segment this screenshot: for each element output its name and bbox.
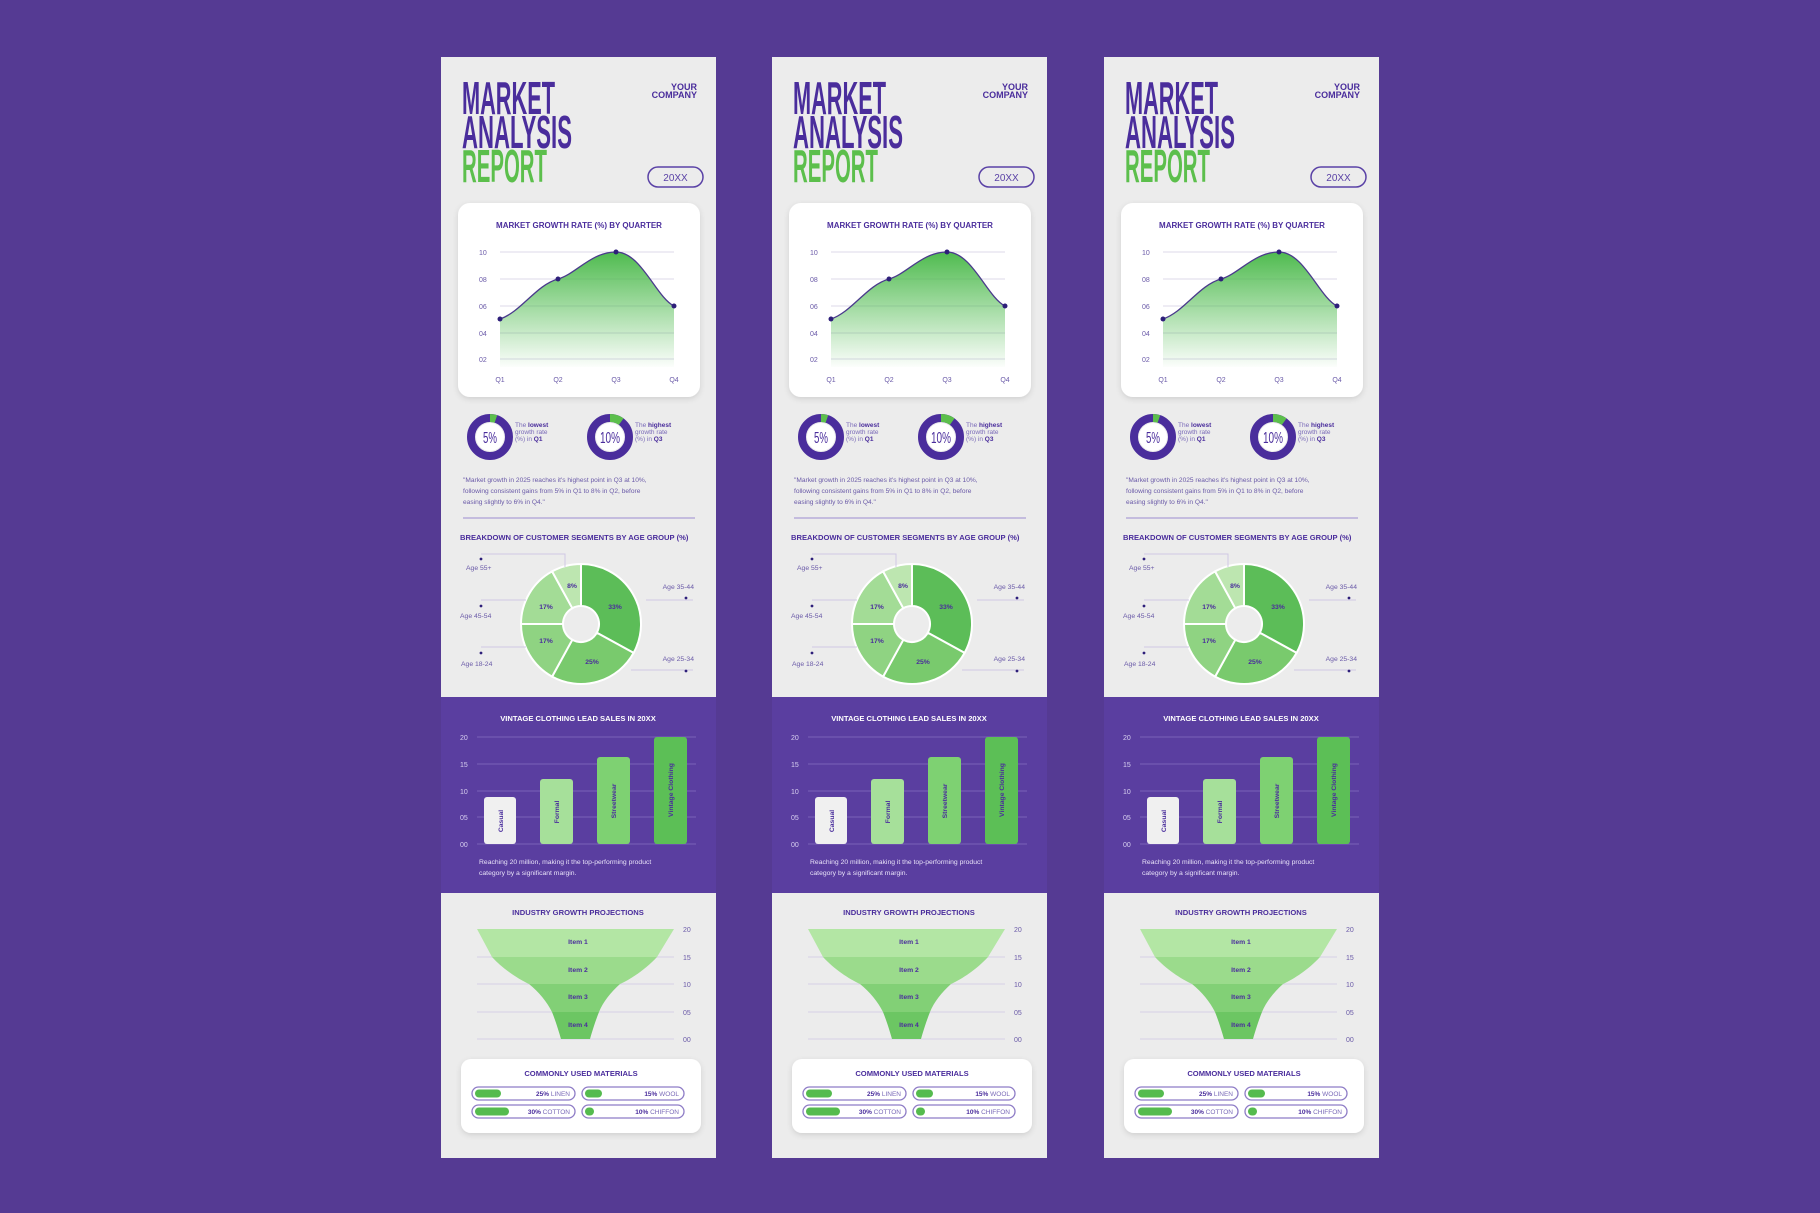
panel: growth rate chart: 06 (479, 304, 487, 311)
donut: lowest: (%) in Q1 (1178, 436, 1206, 443)
panel: growth rate chart: MARKET GROWTH RATE (%) BY QUARTER (827, 221, 993, 230)
quote text: following consistent gains from 5% in Q1 to 8% in Q2, before (1126, 488, 1304, 495)
panel: materials: COMMONLY USED MATERIALS (524, 1069, 638, 1078)
panel: funnel projections: 05 (683, 1010, 691, 1017)
panel: sales bar chart: Streetwear (942, 783, 949, 818)
panel: sales bar chart: VINTAGE CLOTHING LEAD SALES IN 20XX (500, 714, 656, 723)
panel: materials (792, 1059, 1032, 1133)
title: REPORT (793, 140, 878, 192)
panel: funnel projections: INDUSTRY GROWTH PROJECTIONS (512, 908, 644, 917)
panel: growth rate chart (789, 203, 1031, 397)
panel: sales bar chart: category by a significant margin. (1142, 870, 1240, 877)
panel: funnel projections: 10 (683, 982, 691, 989)
panel: sales bar chart: Vintage Clothing (1331, 763, 1338, 817)
quote text: "Market growth in 2025 reaches it's highest point in Q3 at 10%, (794, 477, 978, 484)
quote text (794, 477, 978, 506)
year pill (979, 167, 1034, 187)
panel: sales bar chart: 10 (460, 789, 468, 796)
panel: growth rate chart: Q4 (1332, 377, 1342, 384)
panel: infographic copy 2 (772, 57, 1047, 1158)
title: MARKET (1125, 72, 1218, 124)
donut: lowest: growth rate (1178, 429, 1211, 436)
panel: sales bar chart: Casual (829, 810, 836, 832)
panel: funnel projections (808, 908, 1022, 1044)
panel: age group pie: Age 18-24 (1124, 661, 1156, 668)
panel: funnel projections: 05 (1346, 1010, 1354, 1017)
title: REPORT (1125, 140, 1210, 192)
panel: sales bar chart: 05 (460, 815, 468, 822)
title (1125, 72, 1235, 192)
quote text: following consistent gains from 5% in Q1 to 8% in Q2, before (463, 488, 641, 495)
panel: funnel projections: Item 1 (568, 939, 588, 946)
panel: sales bar chart: 15 (791, 762, 799, 769)
panel: age group pie: Age 25-34 (1326, 656, 1357, 663)
panel: age group pie: BREAKDOWN OF CUSTOMER SEGMENTS BY AGE GROUP (%) (460, 533, 689, 542)
panel: growth rate chart: Q1 (1158, 377, 1168, 384)
quote text (463, 477, 647, 506)
panel: growth rate chart: Q4 (669, 377, 679, 384)
panel: materials: COMMONLY USED MATERIALS (855, 1069, 969, 1078)
panel: growth rate chart: 02 (1142, 357, 1150, 364)
panel: age group pie: 8% (898, 583, 908, 590)
company name (983, 82, 1028, 100)
panel: sales bar chart: Reaching 20 million, making it the top-performing product (810, 859, 982, 866)
company name: YOUR (671, 82, 697, 92)
quote text: following consistent gains from 5% in Q1 to 8% in Q2, before (794, 488, 972, 495)
quote text: "Market growth in 2025 reaches it's highest point in Q3 at 10%, (1126, 477, 1310, 484)
panel: growth rate chart: 04 (479, 331, 487, 338)
panel: age group pie: 17% (1202, 604, 1216, 611)
panel: growth rate chart: 08 (810, 277, 818, 284)
panel: funnel projections: INDUSTRY GROWTH PROJECTIONS (1175, 908, 1307, 917)
panel: materials: 25% LINEN (867, 1091, 901, 1098)
panel: growth rate chart (1121, 203, 1363, 397)
panel: sales bar chart: Formal (1217, 801, 1224, 823)
panel: sales bar chart: Streetwear (611, 783, 618, 818)
panel: sales bar chart: 00 (460, 842, 468, 849)
panel: funnel projections: INDUSTRY GROWTH PROJECTIONS (843, 908, 975, 917)
donut: highest: The highest (635, 422, 672, 429)
title (793, 72, 903, 192)
panel: growth rate chart: Q3 (611, 377, 621, 384)
panel: sales bar chart: Casual (1161, 810, 1168, 832)
panel: sales bar chart: 15 (1123, 762, 1131, 769)
panel: funnel projections: Item 1 (899, 939, 919, 946)
panel: sales bar chart: 00 (791, 842, 799, 849)
panel: sales bar chart: 05 (791, 815, 799, 822)
panel: funnel projections: 00 (683, 1037, 691, 1044)
panel: funnel projections: 10 (1346, 982, 1354, 989)
panel: sales bar chart: 10 (791, 789, 799, 796)
donut: highest: (%) in Q3 (966, 436, 994, 443)
panel: growth rate chart: 08 (1142, 277, 1150, 284)
panel: growth rate chart: 06 (1142, 304, 1150, 311)
donut: highest: growth rate (966, 429, 999, 436)
company name: COMPANY (983, 90, 1028, 100)
panel: growth rate chart: 02 (479, 357, 487, 364)
panel: age group pie: 33% (608, 604, 622, 611)
panel: sales bar chart: 00 (1123, 842, 1131, 849)
panel: age group pie: Age 45-54 (1123, 613, 1155, 620)
donut: lowest: (%) in Q1 (515, 436, 543, 443)
panel: funnel projections: 20 (1014, 927, 1022, 934)
panel: materials: 10% CHIFFON (1298, 1109, 1342, 1116)
panel: growth rate chart: Q2 (884, 377, 894, 384)
quote text: easing slightly to 6% in Q4." (1126, 499, 1209, 506)
company name: YOUR (1002, 82, 1028, 92)
panel: sales bar chart: 20 (1123, 735, 1131, 742)
panel: age group pie: 8% (567, 583, 577, 590)
panel: age group pie: 17% (539, 638, 553, 645)
panel: growth rate chart: 10 (810, 250, 818, 257)
donut: highest: The highest (1298, 422, 1335, 429)
panel: sales bar chart: 15 (460, 762, 468, 769)
panel: sales bar chart: Vintage Clothing (668, 763, 675, 817)
panel: materials: 25% LINEN (1199, 1091, 1233, 1098)
panel: age group pie: 25% (1248, 659, 1262, 666)
panel: materials: COMMONLY USED MATERIALS (1187, 1069, 1301, 1078)
panel: infographic copy 3: ANALYSIS (1125, 106, 1235, 158)
donut: lowest (471, 418, 549, 456)
panel: infographic copy 3 (1104, 57, 1379, 1158)
panel: age group pie (1123, 533, 1357, 684)
panel: funnel projections: 00 (1346, 1037, 1354, 1044)
panel: age group pie: Age 35-44 (663, 584, 694, 591)
panel: funnel projections: 05 (1014, 1010, 1022, 1017)
panel: sales bar chart: Casual (498, 810, 505, 832)
panel: age group pie: 25% (916, 659, 930, 666)
panel: growth rate chart: Q1 (826, 377, 836, 384)
panel: sales bar chart: Formal (554, 801, 561, 823)
panel: sales bar chart: 10 (1123, 789, 1131, 796)
panel: age group pie: 33% (1271, 604, 1285, 611)
donut: lowest: 5% (1146, 430, 1160, 447)
panel: growth rate chart: Q2 (553, 377, 563, 384)
title: MARKET (462, 72, 555, 124)
panel: sales bar chart: Vintage Clothing (999, 763, 1006, 817)
donut: lowest: growth rate (846, 429, 879, 436)
panel: age group pie: 17% (870, 604, 884, 611)
panel: age group pie: Age 18-24 (461, 661, 493, 668)
panel: growth rate chart: Q2 (1216, 377, 1226, 384)
panel: funnel projections: Item 2 (568, 967, 588, 974)
panel: funnel projections: Item 2 (899, 967, 919, 974)
panel: funnel projections (477, 908, 691, 1044)
panel: age group pie: Age 18-24 (792, 661, 824, 668)
panel: growth rate chart: Q4 (1000, 377, 1010, 384)
donut: lowest: The lowest (1178, 422, 1212, 429)
panel: age group pie: Age 35-44 (1326, 584, 1357, 591)
panel: funnel projections: 15 (683, 955, 691, 962)
year pill (1311, 167, 1366, 187)
title: MARKET (793, 72, 886, 124)
donut: lowest: 5% (483, 430, 497, 447)
donut: highest: growth rate (635, 429, 668, 436)
panel: growth rate chart: 06 (810, 304, 818, 311)
title (462, 72, 572, 192)
donut: highest: (%) in Q3 (1298, 436, 1326, 443)
panel: age group pie: 17% (1202, 638, 1216, 645)
panel: sales bar chart (441, 697, 716, 893)
panel: sales bar chart: 05 (1123, 815, 1131, 822)
panel: age group pie: 17% (870, 638, 884, 645)
panel: materials: 30% COTTON (1191, 1109, 1233, 1116)
panel: sales bar chart: Reaching 20 million, making it the top-performing product (479, 859, 651, 866)
panel: growth rate chart: 08 (479, 277, 487, 284)
panel: age group pie: Age 25-34 (994, 656, 1025, 663)
quote text: "Market growth in 2025 reaches it's highest point in Q3 at 10%, (463, 477, 647, 484)
panel: age group pie: Age 45-54 (460, 613, 492, 620)
donut: lowest (1134, 418, 1212, 456)
donut: highest (591, 418, 672, 456)
company name: COMPANY (652, 90, 697, 100)
panel: age group pie: Age 55+ (1129, 565, 1155, 572)
panel: age group pie (460, 533, 694, 684)
company name: YOUR (1334, 82, 1360, 92)
panel: age group pie: Age 35-44 (994, 584, 1025, 591)
panel: materials: 30% COTTON (528, 1109, 570, 1116)
company name (652, 82, 697, 100)
panel: growth rate chart: 04 (810, 331, 818, 338)
panel: funnel projections: 20 (683, 927, 691, 934)
panel: age group pie: BREAKDOWN OF CUSTOMER SEGMENTS BY AGE GROUP (%) (791, 533, 1020, 542)
donut: highest (1254, 418, 1335, 456)
panel: growth rate chart: Q3 (1274, 377, 1284, 384)
donut: highest: growth rate (1298, 429, 1331, 436)
panel: growth rate chart: 10 (1142, 250, 1150, 257)
panel: sales bar chart (1104, 697, 1379, 893)
donut: lowest: 5% (814, 430, 828, 447)
panel: funnel projections: Item 3 (899, 994, 919, 1001)
panel: age group pie: Age 45-54 (791, 613, 823, 620)
panel: materials: 10% CHIFFON (966, 1109, 1010, 1116)
panel: materials: 10% CHIFFON (635, 1109, 679, 1116)
panel: age group pie: 8% (1230, 583, 1240, 590)
panel: materials: 15% WOOL (1307, 1091, 1342, 1098)
quote text: easing slightly to 6% in Q4." (794, 499, 877, 506)
panel: growth rate chart: Q3 (942, 377, 952, 384)
panel: funnel projections: 00 (1014, 1037, 1022, 1044)
panel: age group pie: Age 25-34 (663, 656, 694, 663)
donut: highest: 10% (1263, 430, 1283, 447)
panel: funnel projections: Item 1 (1231, 939, 1251, 946)
quote text (1126, 477, 1310, 506)
panel: growth rate chart: MARKET GROWTH RATE (%) BY QUARTER (496, 221, 662, 230)
panel: sales bar chart: category by a significant margin. (479, 870, 577, 877)
year pill (648, 167, 703, 187)
panel: funnel projections (1140, 908, 1354, 1044)
donut: lowest: growth rate (515, 429, 548, 436)
donut: highest (922, 418, 1003, 456)
panel: growth rate chart: MARKET GROWTH RATE (%) BY QUARTER (1159, 221, 1325, 230)
panel: funnel projections: 15 (1346, 955, 1354, 962)
quote text: easing slightly to 6% in Q4." (463, 499, 546, 506)
panel: funnel projections: Item 4 (568, 1022, 588, 1029)
panel: materials (461, 1059, 701, 1133)
panel: age group pie: Age 55+ (797, 565, 823, 572)
panel: funnel projections: 20 (1346, 927, 1354, 934)
donut: highest: (%) in Q3 (635, 436, 663, 443)
donut: lowest: The lowest (846, 422, 880, 429)
panel: growth rate chart (458, 203, 700, 397)
panel: materials: 15% WOOL (644, 1091, 679, 1098)
panel: sales bar chart: Streetwear (1274, 783, 1281, 818)
year pill: 20XX (994, 173, 1019, 184)
panel: age group pie: 25% (585, 659, 599, 666)
panel: materials: 25% LINEN (536, 1091, 570, 1098)
panel: growth rate chart: 02 (810, 357, 818, 364)
year pill: 20XX (663, 173, 688, 184)
panel: age group pie (791, 533, 1025, 684)
donut: highest: The highest (966, 422, 1003, 429)
panel: sales bar chart: VINTAGE CLOTHING LEAD SALES IN 20XX (831, 714, 987, 723)
panel: age group pie: BREAKDOWN OF CUSTOMER SEGMENTS BY AGE GROUP (%) (1123, 533, 1352, 542)
donut: lowest: (%) in Q1 (846, 436, 874, 443)
panel: age group pie: Age 55+ (466, 565, 492, 572)
donut: highest: 10% (600, 430, 620, 447)
panel: sales bar chart: 20 (460, 735, 468, 742)
panel: growth rate chart: 04 (1142, 331, 1150, 338)
panel: funnel projections: Item 2 (1231, 967, 1251, 974)
donut: lowest: The lowest (515, 422, 549, 429)
donut: lowest (802, 418, 880, 456)
panel: age group pie: 17% (539, 604, 553, 611)
panel: age group pie: 33% (939, 604, 953, 611)
panel: sales bar chart: Reaching 20 million, making it the top-performing product (1142, 859, 1314, 866)
panel: funnel projections: Item 4 (899, 1022, 919, 1029)
panel: funnel projections: 10 (1014, 982, 1022, 989)
company name (1315, 82, 1360, 100)
panel: growth rate chart: Q1 (495, 377, 505, 384)
panel: funnel projections: Item 3 (1231, 994, 1251, 1001)
panel: infographic copy 2: ANALYSIS (793, 106, 903, 158)
panel: sales bar chart: 20 (791, 735, 799, 742)
panel: funnel projections: Item 4 (1231, 1022, 1251, 1029)
donut: highest: 10% (931, 430, 951, 447)
panel: infographic copy 1 (441, 57, 716, 1158)
panel: infographic copy 1: ANALYSIS (462, 106, 572, 158)
panel: materials (1124, 1059, 1364, 1133)
panel: sales bar chart (772, 697, 1047, 893)
panel: materials: 15% WOOL (975, 1091, 1010, 1098)
panel: funnel projections: Item 3 (568, 994, 588, 1001)
panel: funnel projections: 15 (1014, 955, 1022, 962)
panel: sales bar chart: VINTAGE CLOTHING LEAD SALES IN 20XX (1163, 714, 1319, 723)
panel: sales bar chart: Formal (885, 801, 892, 823)
panel: growth rate chart: 10 (479, 250, 487, 257)
panel: materials: 30% COTTON (859, 1109, 901, 1116)
panel: sales bar chart: category by a significant margin. (810, 870, 908, 877)
year pill: 20XX (1326, 173, 1351, 184)
title: REPORT (462, 140, 547, 192)
company name: COMPANY (1315, 90, 1360, 100)
